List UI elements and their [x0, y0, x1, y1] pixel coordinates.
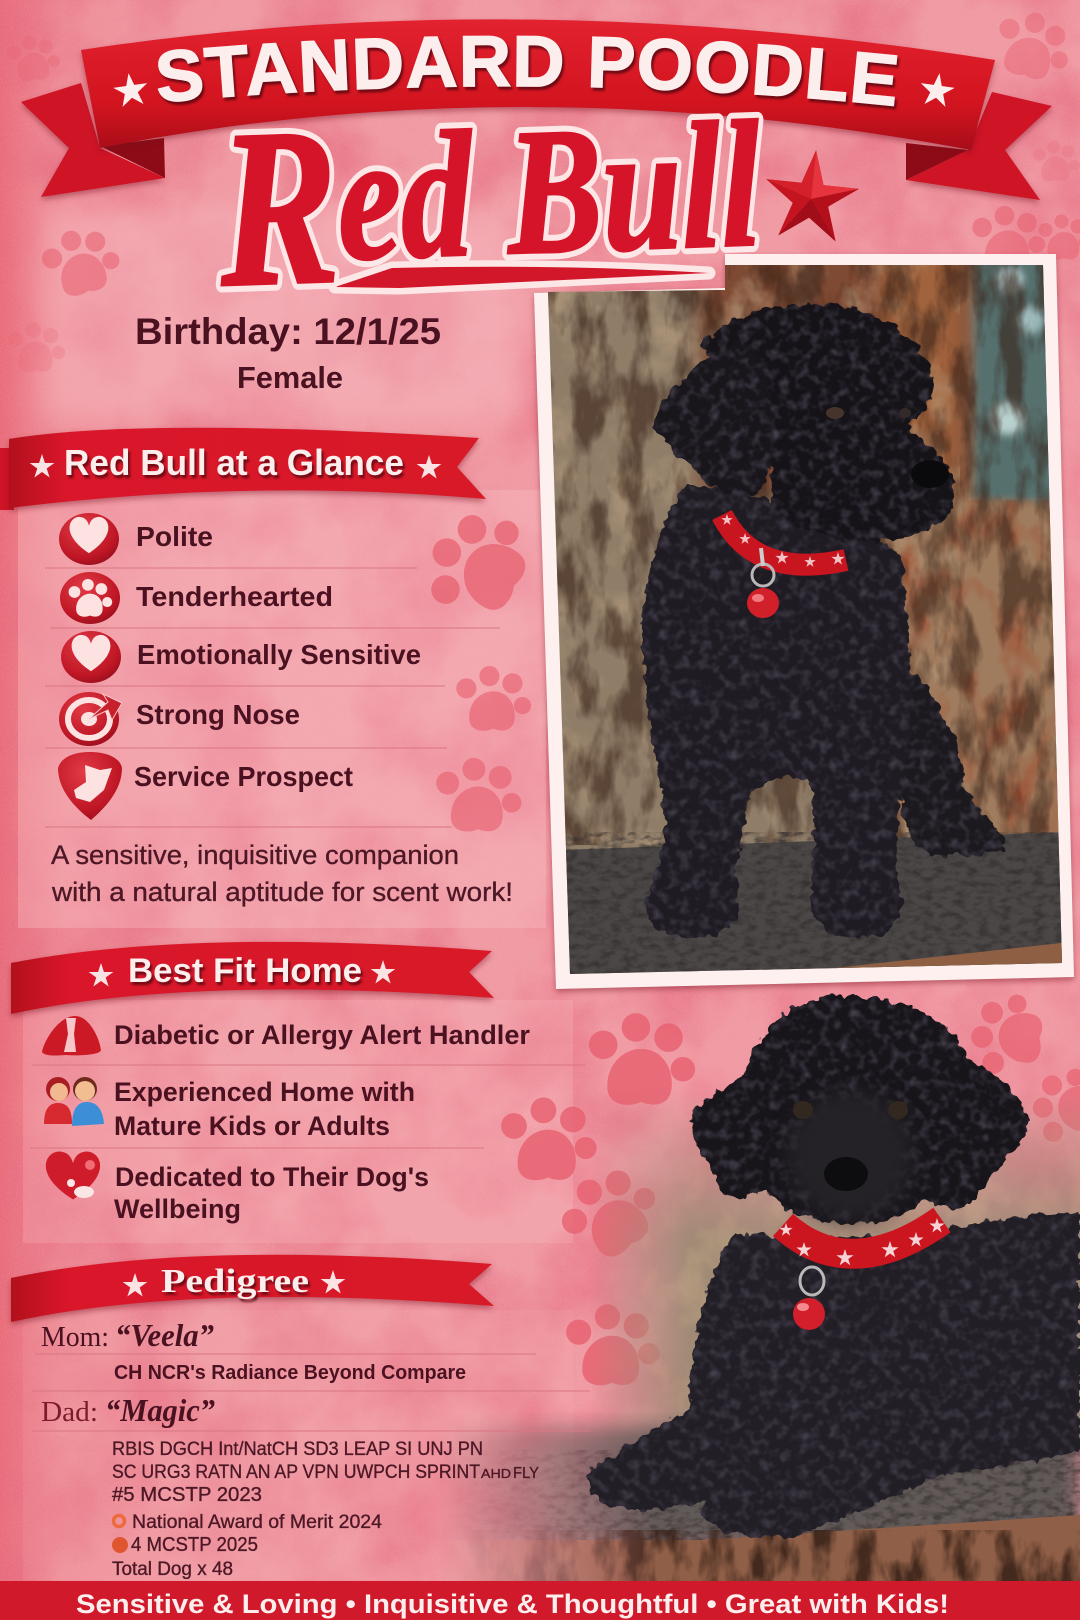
item: experienced home [44, 1077, 415, 1141]
red collar with bell [721, 514, 846, 618]
right ribbon tail [906, 92, 1052, 200]
name heading: Red Bull: R [214, 80, 342, 334]
panel: best fit home [23, 1000, 573, 1243]
icon: two people [44, 1077, 104, 1126]
title text: STANDARD POODLE [158, 36, 901, 110]
section ribbon: Red Bull at a Glance: Red Bull at a Glance [64, 442, 404, 483]
ribbon body [81, 19, 995, 150]
dad: RBIS DGCH Int/NatCH SD3 LEAP SI UNJ PN [112, 1439, 483, 1460]
section ribbon: Pedigree [11, 1255, 494, 1322]
dad: FLY [513, 1465, 539, 1482]
dad [41, 1392, 539, 1580]
panel: pedigree [23, 1310, 573, 1580]
mom: Mom: [41, 1322, 109, 1353]
birthday and sex [135, 311, 441, 395]
dad: AHD [481, 1466, 511, 1481]
best fit home list [30, 1016, 585, 1224]
icon: award disc [112, 1537, 128, 1553]
item: alert handler: Diabetic or Allergy Alert Handler [114, 1020, 530, 1050]
bark fade background [600, 1105, 1080, 1440]
dad: Total Dog x 48 [112, 1559, 233, 1580]
mom: CH NCR's Radiance Beyond Compare [114, 1362, 466, 1384]
lying dog [587, 996, 1080, 1537]
face details [911, 460, 949, 488]
section ribbon: Best Fit Home [11, 942, 494, 1014]
dad: Dad: [41, 1397, 98, 1428]
item: Polite [59, 513, 213, 565]
item: Emotionally Sensitive [61, 631, 421, 683]
item: Strong Nose: Strong Nose [136, 699, 300, 730]
dad: 4 MCSTP 2025 [131, 1534, 258, 1556]
item: Service Prospect: Service Prospect [134, 761, 353, 792]
name heading: Red Bull: ed Bull [334, 84, 764, 299]
item: Strong Nose [59, 692, 300, 746]
mom: “Veela” [115, 1317, 214, 1353]
dad: National Award of Merit 2024 [132, 1512, 382, 1533]
item: Tenderhearted [60, 572, 333, 624]
item: experienced home: Experienced Home with [114, 1077, 415, 1107]
icon: faceted star [761, 145, 862, 243]
dad: “Magic” [105, 1392, 215, 1428]
swoosh under name [335, 267, 709, 288]
summary paragraph: A sensitive, inquisitive companion [51, 840, 459, 870]
pedigree details [32, 1317, 590, 1580]
name heading: Red Bull [214, 65, 862, 334]
summary paragraph: with a natural aptitude for scent work! [51, 877, 513, 907]
name heading: Red Bull: R [214, 80, 342, 334]
footer banner: Sensitive & Loving • Inquisitive & Thoughtful • Great with Kids! [76, 1589, 949, 1619]
at a glance list [45, 513, 500, 827]
panel: at a glance [18, 490, 546, 928]
section ribbon: Pedigree: Pedigree [161, 1263, 309, 1300]
item: Emotionally Sensitive: Emotionally Sensitive [137, 639, 421, 670]
red collar with bell [779, 1218, 945, 1330]
face [788, 1091, 912, 1219]
summary paragraph [51, 840, 513, 907]
item: experienced home: Mature Kids or Adults [114, 1111, 390, 1141]
left ribbon tail [21, 83, 165, 197]
stump top and side [400, 1428, 1080, 1581]
dad: #5 MCSTP 2023 [112, 1484, 262, 1506]
bottom photo: lying poodle on stump [400, 996, 1080, 1581]
item: Tenderhearted: Tenderhearted [136, 581, 333, 612]
icon: award ring [114, 1516, 124, 1526]
mom [41, 1317, 466, 1384]
top photo frame with standing poodle [534, 235, 1080, 989]
item: dedicated: Dedicated to Their Dog's [115, 1162, 429, 1192]
section ribbon: Best Fit Home: Best Fit Home [128, 952, 362, 990]
item: Service Prospect [58, 752, 353, 820]
item: dedicated [46, 1152, 429, 1224]
item: Polite: Polite [136, 521, 213, 552]
banner stars [112, 71, 150, 108]
footer banner [0, 1581, 1080, 1620]
birthday and sex: Female [237, 360, 343, 395]
panel: soft paper behind name and birthday [40, 210, 520, 420]
section ribbon: Red Bull at a Glance [0, 428, 486, 510]
top title banner: STANDARD POODLE [20, 19, 1052, 240]
standing dog [642, 304, 1004, 938]
item: alert handler [42, 1016, 530, 1056]
item: dedicated: Wellbeing [114, 1194, 241, 1224]
dad: SC URG3 RATN AN AP VPN UWPCH SPRINT [112, 1462, 480, 1483]
birthday and sex: Birthday: 12/1/25 [135, 311, 441, 352]
name heading: Red Bull: ed Bull [334, 84, 764, 299]
